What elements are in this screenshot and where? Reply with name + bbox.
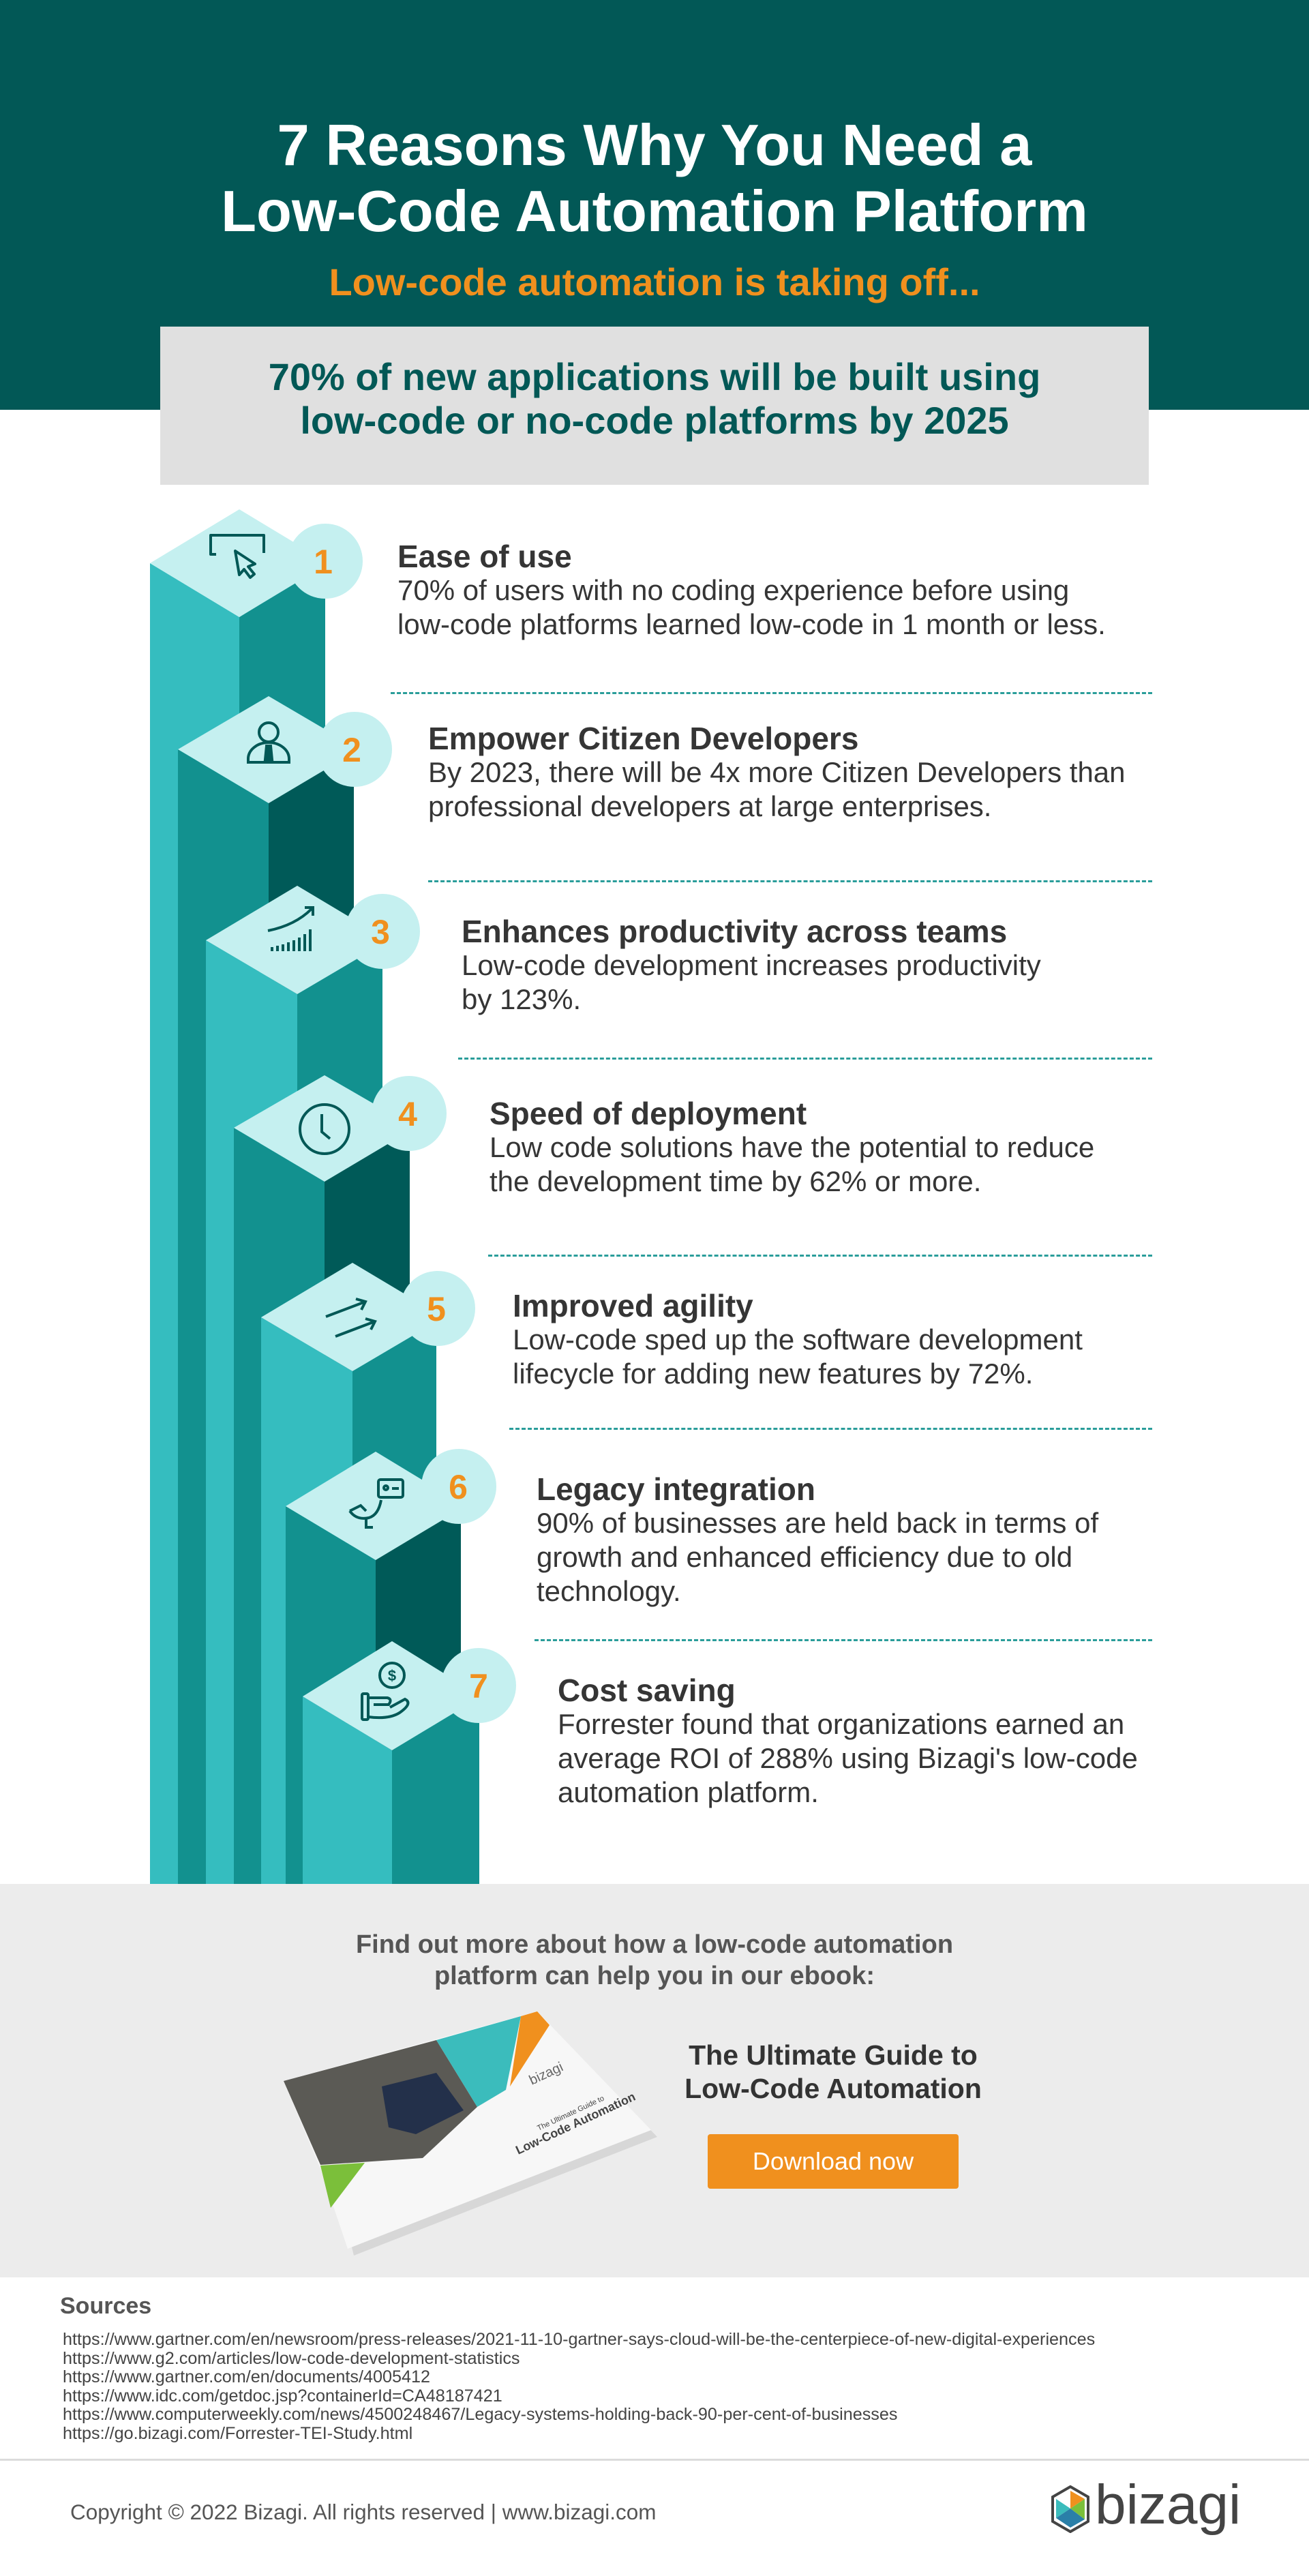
numbers: 4 — [398, 1095, 417, 1133]
ebook intro text — [356, 1930, 953, 1990]
stat box: low-code or no-code platforms by 2025 — [300, 399, 1009, 442]
sources list: https://www.idc.com/getdoc.jsp?containerId=CA48187421 — [63, 2386, 502, 2406]
reason 6 text: 90% of businesses are held back in terms of — [537, 1507, 1098, 1539]
reason 5 text: Improved agility — [513, 1288, 753, 1323]
numbers: 2 — [342, 731, 361, 769]
reason 6 text: growth and enhanced efficiency due to old — [537, 1541, 1072, 1573]
sources list — [63, 2330, 1095, 2443]
ebook intro text: platform can help you in our ebook: — [434, 1962, 875, 1990]
reason 7 text: average ROI of 288% using Bizagi's low-code — [558, 1742, 1138, 1774]
reason 2 text: By 2023, there will be 4x more Citizen Developers than — [428, 756, 1126, 788]
dividers — [391, 692, 1152, 694]
ebook title — [684, 2039, 982, 2104]
numbers: 7 — [469, 1667, 488, 1705]
ebook panel — [0, 1884, 1309, 2277]
step 4 column — [234, 1075, 447, 1884]
download button: Download now — [753, 2147, 914, 2175]
icon: person — [248, 723, 289, 762]
icon: arrows — [326, 1299, 375, 1336]
footer — [0, 2459, 1309, 2576]
sources list: https://www.computerweekly.com/news/4500248467/Legacy-systems-holding-back-90-per-cent-of-businesses — [63, 2405, 898, 2424]
ebook cover illustration: The Ultimate Guide to — [536, 2095, 605, 2133]
ebook cover illustration — [284, 2011, 657, 2256]
reason 4 text: Low code solutions have the potential to reduce — [490, 1131, 1094, 1163]
ebook title: The Ultimate Guide to — [689, 2039, 978, 2071]
icon: hand coin: $ — [388, 1667, 396, 1684]
step 7 column — [303, 1641, 516, 1884]
reason 7 text: Forrester found that organizations earned an — [558, 1708, 1124, 1740]
staircase chart — [150, 509, 516, 1884]
reason 1 text: 70% of users with no coding experience before using — [397, 574, 1069, 606]
reason 6 text — [537, 1471, 1099, 1607]
numbers: 6 — [449, 1468, 468, 1506]
reason 3 text: by 123%. — [462, 983, 581, 1015]
sources list: https://www.gartner.com/en/newsroom/press-releases/2021-11-10-gartner-says-cloud-will-be-the-centerpiece-of-new-digital-experiences — [63, 2330, 1095, 2349]
reason 2 text: professional developers at large enterprises. — [428, 790, 991, 822]
title: 7 Reasons Why You Need a — [277, 113, 1032, 178]
reason 3 text: Low-code development increases productivity — [462, 949, 1041, 981]
sources list: https://go.bizagi.com/Forrester-TEI-Study.html — [63, 2424, 412, 2443]
step 5 column — [261, 1263, 475, 1884]
reason 4 text — [490, 1096, 1094, 1197]
stat box: 70% of new applications will be built using — [269, 355, 1040, 398]
ebook title: Low-Code Automation — [684, 2073, 982, 2104]
subtitle: Low-code automation is taking off... — [329, 260, 980, 303]
sources — [60, 2293, 1095, 2443]
bizagi logo: bizagi — [1095, 2474, 1241, 2536]
icon: screen cursor — [211, 535, 264, 578]
ebook intro text: Find out more about how a low-code automation — [356, 1930, 953, 1959]
reason 7 text: Cost saving — [558, 1673, 736, 1708]
title: Low-Code Automation Platform — [221, 179, 1088, 244]
reason 2 text — [428, 721, 1126, 822]
numbers: 5 — [427, 1290, 446, 1328]
reason 4 text: the development time by 62% or more. — [490, 1165, 981, 1197]
reason 3 text — [462, 914, 1041, 1015]
reason 1 text: Ease of use — [397, 539, 572, 574]
copyright: Copyright © 2022 Bizagi. All rights reserved | www.bizagi.com — [70, 2500, 657, 2524]
reason 1 text: low-code platforms learned low-code in 1 month or less. — [397, 608, 1106, 640]
step 3 column — [206, 886, 420, 1884]
sources list: https://www.gartner.com/en/documents/4005412 — [63, 2367, 430, 2386]
numbers: 3 — [371, 913, 390, 951]
reason 3 text: Enhances productivity across teams — [462, 914, 1007, 949]
icon: clock — [300, 1105, 349, 1154]
step 2 column — [178, 696, 392, 1884]
reason 5 text — [513, 1288, 1083, 1390]
download button — [708, 2134, 959, 2189]
reason 5 text: Low-code sped up the software development — [513, 1323, 1083, 1356]
stat box — [160, 327, 1149, 485]
numbers: 1 — [314, 543, 333, 581]
reason 1 text — [397, 539, 1106, 640]
title — [221, 113, 1088, 244]
step 1 column — [150, 509, 363, 1884]
icon: growth chart — [268, 908, 313, 951]
ebook cover illustration: Low-Code Automation — [513, 2090, 637, 2157]
header band — [0, 0, 1309, 410]
numbers — [314, 543, 488, 1705]
ebook cover illustration: bizagi — [527, 2060, 565, 2088]
reason 7 text — [558, 1673, 1138, 1808]
reason 6 text: technology. — [537, 1575, 681, 1607]
reason 7 text: automation platform. — [558, 1776, 819, 1808]
icon: hand coin — [362, 1663, 408, 1720]
reason 2 text: Empower Citizen Developers — [428, 721, 858, 756]
sources list: https://www.g2.com/articles/low-code-development-statistics — [63, 2349, 520, 2368]
reason 5 text: lifecycle for adding new features by 72%. — [513, 1358, 1033, 1390]
icon: legacy bird/robot — [350, 1480, 403, 1527]
reason 4 text: Speed of deployment — [490, 1096, 807, 1131]
step 6 column — [286, 1449, 496, 1884]
reason 6 text: Legacy integration — [537, 1471, 815, 1507]
sources heading: Sources — [60, 2293, 151, 2319]
